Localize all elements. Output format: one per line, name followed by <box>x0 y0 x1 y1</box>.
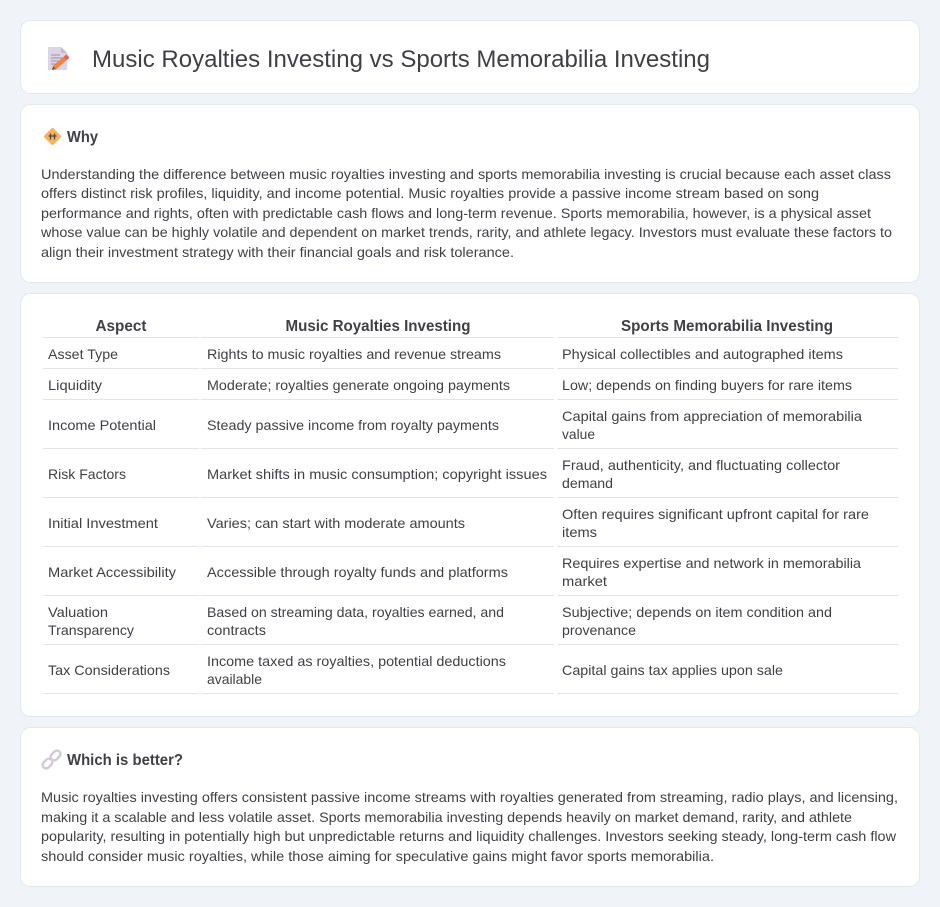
row: valuation transparency: contracts <box>207 622 266 638</box>
row: valuation transparency: provenance <box>562 622 636 638</box>
row: risk factors: Fraud, authenticity, and fluctuating collector <box>562 457 840 473</box>
why text block: whose value can be highly volatile and dependent on market trends, rarity, and athlete legacy. Investors must evaluate these factors to <box>40 224 892 240</box>
table rules <box>43 337 898 694</box>
row: income potential: Steady passive income from royalty payments <box>207 417 499 433</box>
row: initial investment <box>48 506 869 540</box>
row: asset type <box>48 346 843 362</box>
row: risk factors <box>48 457 840 491</box>
table header: Music Royalties Investing <box>286 318 470 335</box>
row: tax considerations: Capital gains tax applies upon sale <box>562 662 783 678</box>
table header <box>96 318 833 335</box>
which text block: should consider music royalties, while those aiming for speculative gains might favor sports memorabilia. <box>41 848 714 864</box>
why text block: Understanding the difference between music royalties investing and sports memorabilia investing is crucial because each asset class <box>41 166 891 182</box>
which text block: making it a scalable and less volatile asset. Sports memorabilia investing depends heavily on market demand, rarity, and athlete <box>41 809 852 825</box>
row: liquidity: Liquidity <box>48 377 102 393</box>
row: initial investment: Varies; can start with moderate amounts <box>207 515 465 531</box>
row: valuation transparency: Valuation <box>48 604 108 620</box>
row: market accessibility: Market Accessibility <box>48 564 176 580</box>
row: tax considerations: Income taxed as royalties, potential deductions <box>207 653 506 669</box>
row: initial investment: items <box>562 524 597 540</box>
panel: which is better <box>20 728 920 886</box>
row: market accessibility: Accessible through royalty funds and platforms <box>207 564 508 580</box>
why text block: performance and rights, often with predictable cash flows and long-term revenue. Sports memorabilia, however, is a physical asset <box>41 205 871 221</box>
row: liquidity: Moderate; royalties generate ongoing payments <box>207 377 510 393</box>
row: valuation transparency: Subjective; depends on item condition and <box>562 604 832 620</box>
row: asset type: Asset Type <box>48 346 118 362</box>
row: income potential <box>48 408 862 442</box>
panel: why <box>20 104 920 282</box>
why text block <box>40 166 892 260</box>
row: valuation transparency: Based on streaming data, royalties earned, and <box>207 604 504 620</box>
row: tax considerations <box>48 653 783 687</box>
title: Music Royalties Investing vs Sports Memorabilia Investing <box>92 46 710 73</box>
row: initial investment: Initial Investment <box>48 515 158 531</box>
heading: which is better: Which is better? <box>67 752 183 769</box>
row: market accessibility: market <box>562 573 607 589</box>
row: risk factors: Market shifts in music consumption; copyright issues <box>207 466 547 482</box>
row: income potential: Capital gains from appreciation of memorabilia <box>562 408 862 424</box>
which text block: popularity, resulting in potentially high but unpredictable returns and liquidity challenges. Investors seeking steady, long-term cash flow <box>41 828 897 844</box>
why text block: offers distinct risk profiles, liquidity, and income potential. Music royalties provide a passive income stream based on song <box>41 185 819 201</box>
row: valuation transparency: Transparency <box>48 622 134 638</box>
panel: comparison table <box>20 294 920 716</box>
icon: chain link <box>41 749 62 770</box>
row: tax considerations: available <box>207 671 262 687</box>
why text block: align their investment strategy with their financial goals and risk tolerance. <box>41 244 514 260</box>
row: valuation transparency <box>48 604 832 638</box>
panel: title card <box>20 20 920 94</box>
which text block: Music royalties investing offers consistent passive income streams with royalties generated from streaming, radio plays, and licensing, <box>41 789 898 805</box>
row: asset type: Physical collectibles and autographed items <box>562 346 843 362</box>
which text block <box>41 789 898 864</box>
row: income potential: value <box>562 426 595 442</box>
row: initial investment: Often requires significant upfront capital for rare <box>562 506 869 522</box>
row: income potential: Income Potential <box>48 417 156 433</box>
row: liquidity <box>48 377 852 393</box>
row: risk factors: demand <box>562 475 613 491</box>
row: tax considerations: Tax Considerations <box>48 662 170 678</box>
table header: Sports Memorabilia Investing <box>621 318 833 335</box>
row: market accessibility <box>48 555 861 589</box>
heading: why: Why <box>67 129 98 146</box>
row: asset type: Rights to music royalties and revenue streams <box>207 346 501 362</box>
row: market accessibility: Requires expertise and network in memorabilia <box>562 555 861 571</box>
table header: Aspect <box>96 318 147 335</box>
row: liquidity: Low; depends on finding buyers for rare items <box>562 377 852 393</box>
icon: document with pencil <box>48 47 68 70</box>
row: risk factors: Risk Factors <box>48 466 126 482</box>
icon: warning diamond <box>43 127 62 146</box>
